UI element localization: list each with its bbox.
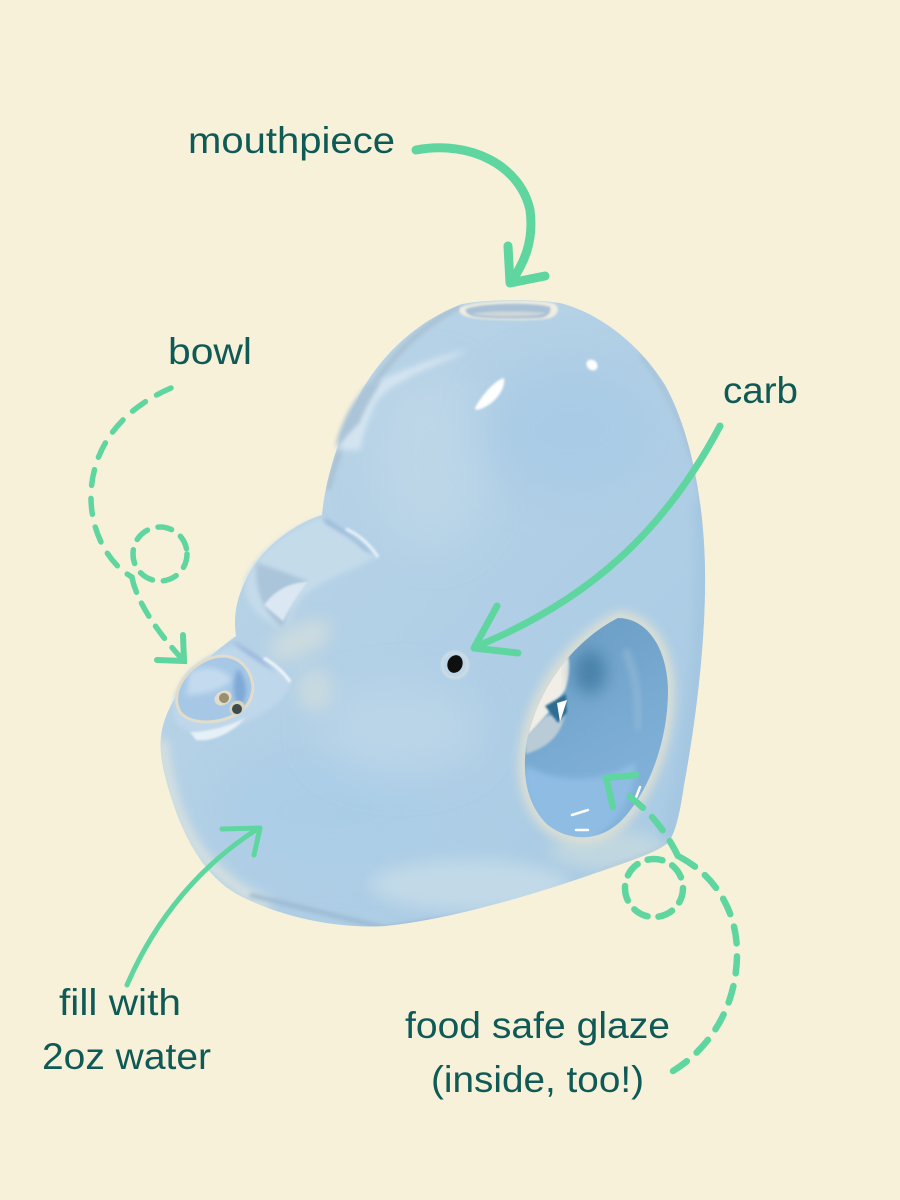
label: food safe glaze: (inside, too!) [431,1059,644,1100]
shoulder lobe with glossy highlights [245,517,378,630]
label: fill with 2oz water: 2oz water [42,1036,211,1077]
dashed arrow: food safe glaze [606,775,737,1071]
arrow: fill with water [127,828,260,985]
dashed arrow: bowl [91,388,187,661]
label: fill with 2oz water: fill with [59,982,181,1023]
mouthpiece opening [459,301,558,320]
label: carb: carb [723,370,798,411]
label: food safe glaze [405,1005,670,1100]
carb hole [442,652,468,678]
product photo: blue ceramic heart pipe [161,300,705,928]
label: fill with 2oz water [42,982,211,1077]
arrow: mouthpiece [416,148,545,283]
arrow: carb [474,426,720,653]
label: mouthpiece: mouthpiece [188,120,395,161]
ceramic body [161,300,705,926]
label: bowl: bowl [168,331,252,372]
glaze highlights [335,350,600,450]
through hole [520,610,675,845]
bowl [173,641,291,740]
label: food safe glaze: food safe glaze [405,1005,670,1046]
